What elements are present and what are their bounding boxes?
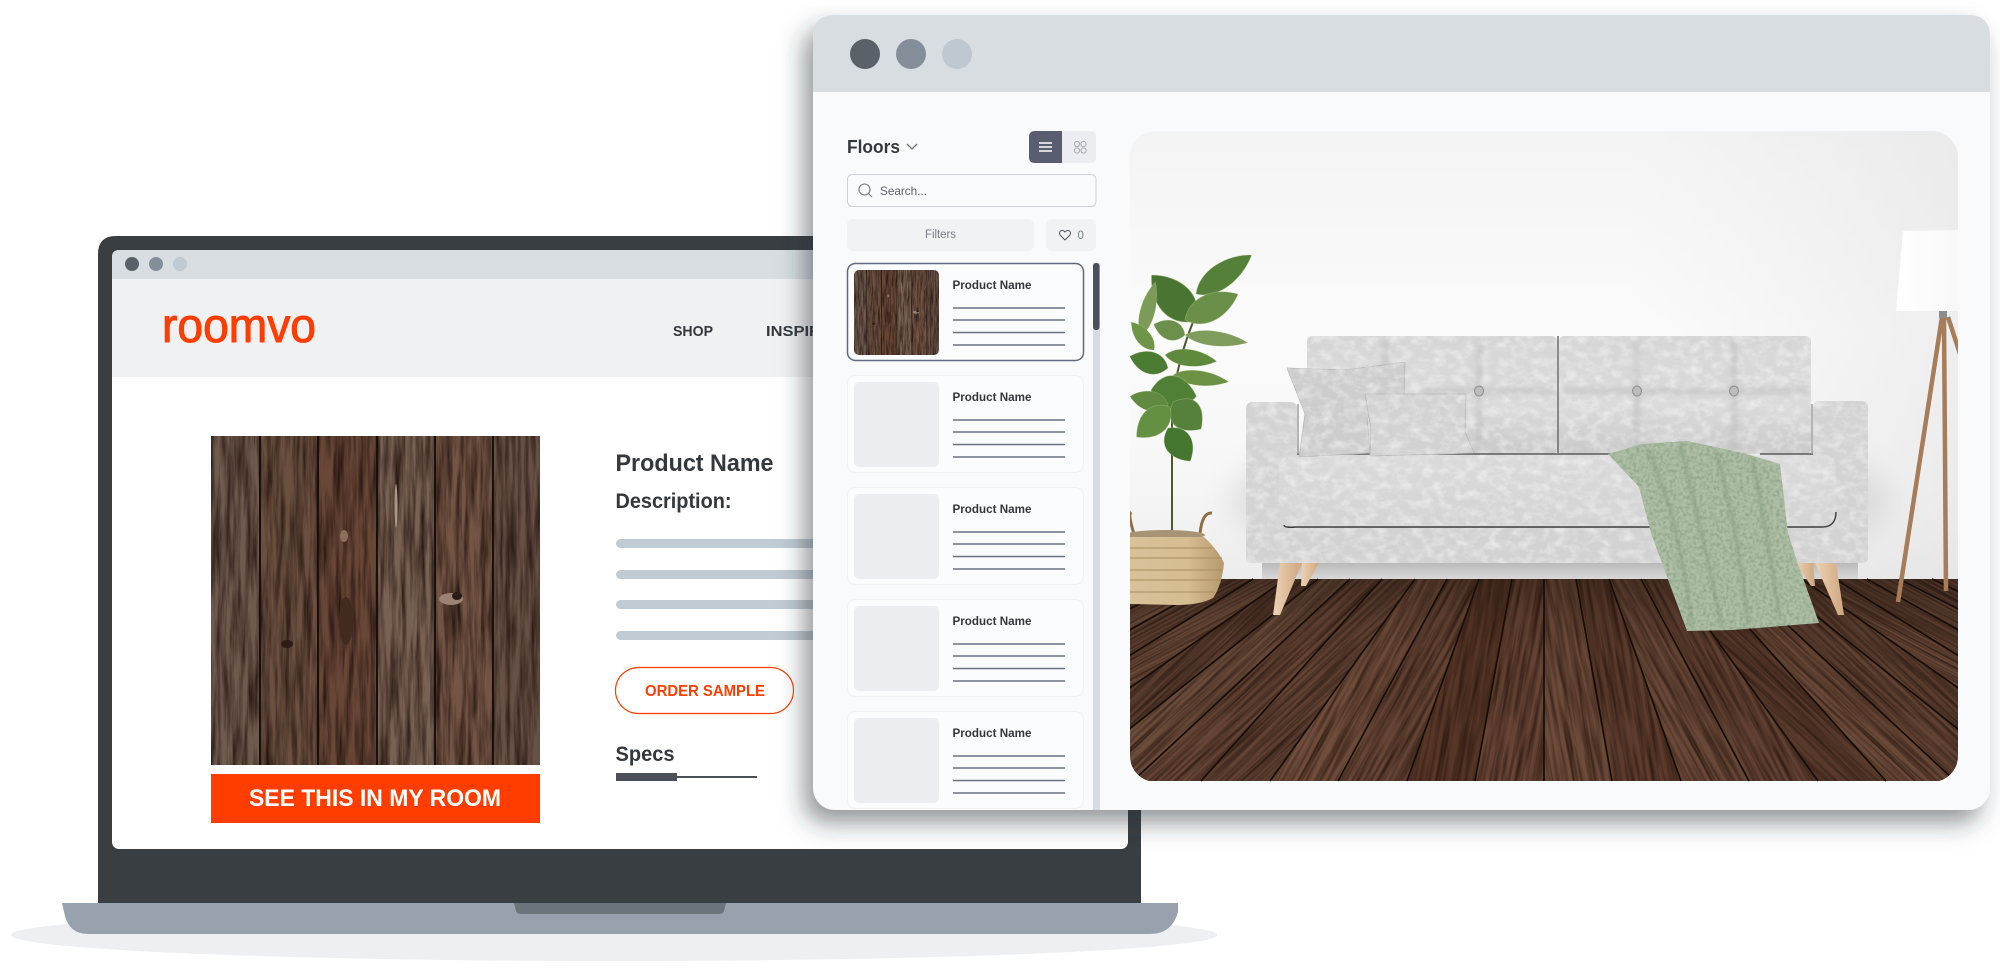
throw pillows bbox=[1287, 362, 1474, 457]
icon: chevron bbox=[907, 144, 917, 149]
green throw blanket bbox=[1608, 441, 1819, 631]
nav item: shop: SHOP bbox=[673, 323, 713, 340]
specs heading: Specs bbox=[616, 743, 674, 766]
product card 4 bbox=[848, 600, 1084, 696]
laptop bbox=[62, 236, 1178, 934]
description heading: Description: bbox=[616, 490, 732, 513]
laptop notch bbox=[514, 903, 726, 914]
product card 2: Product Name bbox=[952, 390, 1032, 404]
see this in my room button bbox=[211, 774, 540, 823]
product wood swatch bbox=[211, 436, 540, 765]
browser title bar bbox=[112, 250, 1128, 279]
scrollbar track bbox=[1093, 263, 1100, 810]
favorites button: 0 bbox=[1078, 230, 1084, 242]
visualizer window bbox=[630, 15, 2000, 810]
specs tab indicator bbox=[616, 773, 757, 781]
sofa bbox=[1246, 336, 1868, 631]
roomvo logo: roomvo bbox=[162, 300, 316, 353]
product card 1 selected bbox=[848, 264, 1084, 360]
plant stem bbox=[1172, 322, 1193, 535]
filters button: Filters bbox=[925, 229, 956, 241]
site header bar bbox=[112, 279, 1128, 377]
sofa legs bbox=[1273, 563, 1844, 615]
product card 5 bbox=[848, 712, 1084, 808]
window panel with shadow bbox=[813, 15, 1990, 810]
potted plant bbox=[1130, 254, 1252, 605]
browser window dots bbox=[125, 257, 187, 271]
laptop base bbox=[62, 903, 1178, 934]
laptop screen bbox=[112, 250, 1128, 849]
floors dropdown title: Floors bbox=[847, 136, 900, 157]
order sample button: ORDER SAMPLE bbox=[645, 683, 765, 700]
search box bbox=[848, 174, 1096, 206]
room scene bbox=[1130, 131, 1958, 782]
favorites button bbox=[1046, 219, 1096, 251]
filters button bbox=[847, 219, 1034, 251]
window dots bbox=[850, 39, 972, 69]
scrollbar thumb bbox=[1093, 263, 1100, 330]
see this in my room button: SEE THIS IN MY ROOM bbox=[249, 785, 501, 812]
product card 1 selected: Product Name bbox=[952, 278, 1032, 292]
floor lamp bbox=[1896, 230, 1962, 602]
product card 3: Product Name bbox=[952, 502, 1032, 516]
wall bbox=[1130, 131, 1958, 580]
product card 3 bbox=[848, 488, 1084, 584]
sofa buttons bbox=[1474, 386, 1738, 396]
search box: Search... bbox=[880, 184, 927, 198]
plant leaves bbox=[1130, 254, 1252, 462]
laptop bezel bbox=[98, 236, 1141, 903]
product card 2 bbox=[848, 376, 1084, 472]
nav item: inspiration: INSPIRATION bbox=[766, 323, 871, 340]
laptop ground shadow bbox=[11, 909, 1217, 961]
product name heading: Product Name bbox=[616, 450, 774, 477]
product card 5: Product Name bbox=[952, 726, 1032, 740]
window title bar bbox=[813, 15, 1990, 92]
sofa upholstery bbox=[1246, 336, 1868, 563]
wood floor bbox=[1130, 578, 1958, 782]
order sample button bbox=[616, 668, 794, 714]
description placeholder lines bbox=[616, 539, 916, 640]
sofa creases bbox=[1284, 336, 1836, 527]
woven basket bbox=[1125, 512, 1224, 605]
product card 4: Product Name bbox=[952, 614, 1032, 628]
view toggle bbox=[1029, 131, 1096, 163]
